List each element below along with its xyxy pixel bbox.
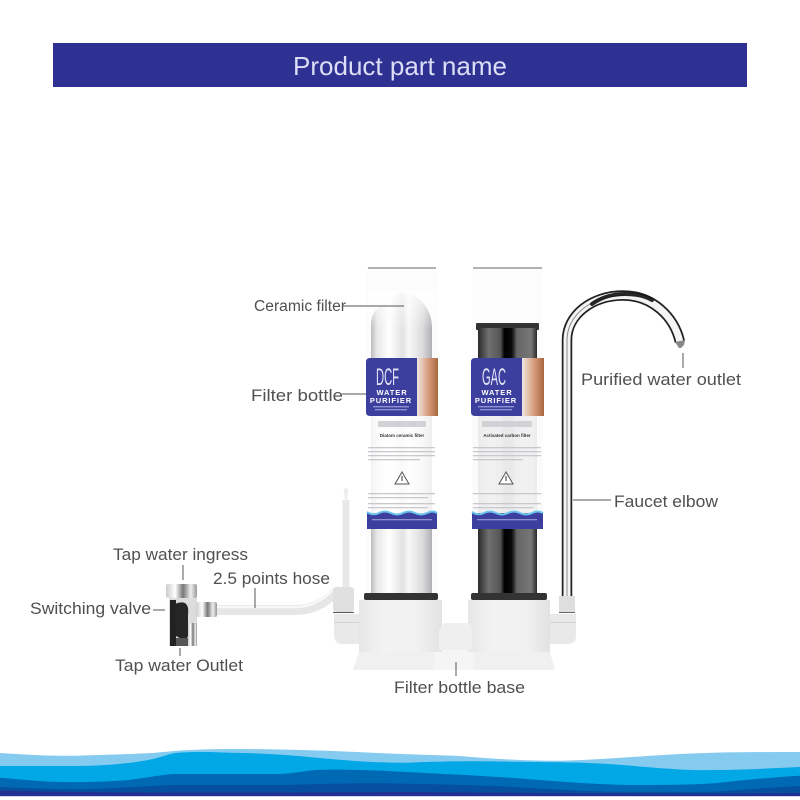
icon: left filter bottle (DCF) <box>366 268 438 594</box>
icon: faucet elbow <box>567 294 685 597</box>
label: Filter bottle base: Filter bottle base <box>394 678 525 697</box>
icon: filter bottle base <box>334 593 576 670</box>
label: DCF panel <box>366 358 438 416</box>
label: Faucet elbow: Faucet elbow <box>614 492 719 511</box>
label: Tap water ingress: Tap water ingress <box>113 545 248 564</box>
label: DCF panel: PURIFIER <box>370 396 412 405</box>
icon: switching valve <box>166 584 217 646</box>
label: Tap water Outlet: Tap water Outlet <box>115 656 243 675</box>
leader lines <box>153 306 683 676</box>
icon: inlet hose <box>217 489 354 613</box>
label: GAC panel <box>471 358 544 416</box>
label: 2.5 points hose: 2.5 points hose <box>213 569 330 588</box>
label: warning text: Diatom ceramic filter <box>380 433 424 438</box>
label: wave band <box>472 512 543 529</box>
label: GAC panel: WATER <box>481 388 513 397</box>
label: DCF panel: DCF <box>376 364 399 391</box>
label: DCF panel: WATER <box>376 388 408 397</box>
title banner: Product part name <box>293 51 507 81</box>
icon: right filter bottle (GAC) <box>471 268 544 594</box>
label: GAC panel: PURIFIER <box>475 396 517 405</box>
label: GAC panel: GAC <box>482 364 506 391</box>
label: Ceramic filter: Ceramic filter <box>254 298 346 315</box>
label: Purified water outlet: Purified water outlet <box>581 370 741 389</box>
label: warning text: Activated carbon filter <box>483 433 531 438</box>
label: warning text <box>368 421 435 508</box>
title banner <box>53 43 747 87</box>
label: wave band <box>367 512 437 529</box>
label: Filter bottle: Filter bottle <box>251 386 343 405</box>
label: warning text <box>473 421 541 508</box>
label: Switching valve: Switching valve <box>30 599 151 618</box>
footer waves <box>0 749 800 797</box>
